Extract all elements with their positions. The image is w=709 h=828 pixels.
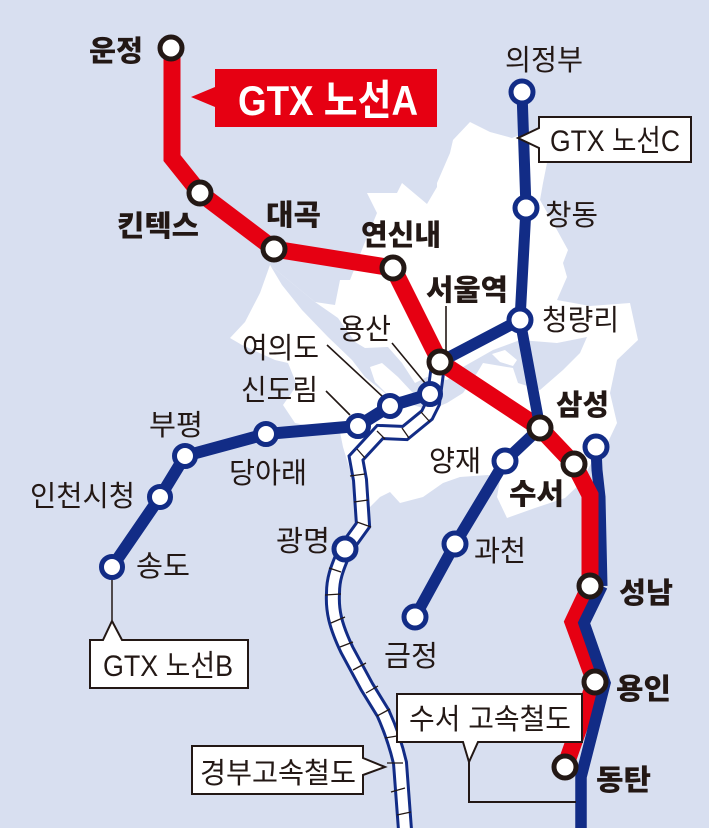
labels: other stations: 당아래 — [229, 450, 307, 492]
labels: major stations: 운정 — [89, 28, 143, 70]
labels: other stations: 용산 — [339, 306, 391, 348]
labels: major stations: 수서 — [509, 471, 564, 513]
labels: major stations: 동탄 — [596, 757, 651, 799]
callout: Gyeongbu high-speed rail: 경부고속철도 — [200, 750, 356, 792]
labels: other stations: 광명 — [276, 518, 330, 560]
rail: Gyeongbu high-speed line — [325, 365, 438, 828]
labels: other stations: 신도림 — [241, 367, 318, 409]
labels: major stations — [89, 28, 673, 799]
banner: GTX line A: GTX 노선A — [238, 77, 418, 124]
labels: major stations: 성남 — [619, 570, 673, 612]
line: Samseong to Geumjeong — [415, 428, 540, 617]
labels: other stations: 과천 — [474, 528, 526, 570]
banner: GTX line A — [191, 69, 437, 127]
labels: other stations: 금정 — [384, 633, 438, 675]
line: GTX lower-east blue segment — [581, 586, 605, 828]
line: GTX C lower-east upper segment — [596, 448, 602, 586]
labels: other stations: 부평 — [149, 402, 203, 444]
callout: GTX line C: GTX 노선C — [550, 125, 680, 158]
labels: other stations: 인천시청 — [30, 473, 135, 515]
line: GTX A red route — [172, 48, 595, 767]
stations: GTX B and C — [102, 81, 607, 628]
map: Han river — [270, 265, 587, 410]
labels: major stations: 대곡 — [266, 192, 321, 234]
map: river lens — [492, 350, 517, 366]
leader lines — [326, 306, 446, 415]
stations: GTX A — [160, 37, 606, 778]
map: Seoul land area — [230, 122, 638, 518]
labels: other stations: 의정부 — [505, 37, 583, 79]
line: Cheongnyangni to Seoul Station — [440, 320, 520, 362]
labels: major stations: 연신내 — [361, 212, 441, 254]
labels: other stations: 여의도 — [242, 325, 319, 367]
line: GTX C north-south — [520, 92, 540, 428]
callout: GTX line C — [518, 117, 691, 162]
callout: Suseo high-speed rail — [397, 694, 582, 802]
callout: GTX line B — [90, 580, 248, 688]
labels: other stations — [30, 37, 619, 675]
callout: GTX line B: GTX 노선B — [103, 650, 233, 683]
callout: Suseo high-speed rail: 수서 고속철도 — [409, 696, 571, 738]
labels: major stations: 용인 — [616, 666, 671, 708]
labels: other stations: 송도 — [136, 543, 190, 585]
labels: major stations: 서울역 — [426, 267, 508, 309]
labels: major stations: 킨텍스 — [117, 203, 199, 245]
labels: other stations: 양재 — [429, 438, 481, 480]
labels: other stations: 청량리 — [542, 297, 619, 339]
labels: other stations: 창동 — [545, 192, 598, 234]
line: GTX B — [112, 394, 430, 567]
labels: major stations: 삼성 — [556, 382, 609, 424]
map: river island — [370, 363, 420, 398]
